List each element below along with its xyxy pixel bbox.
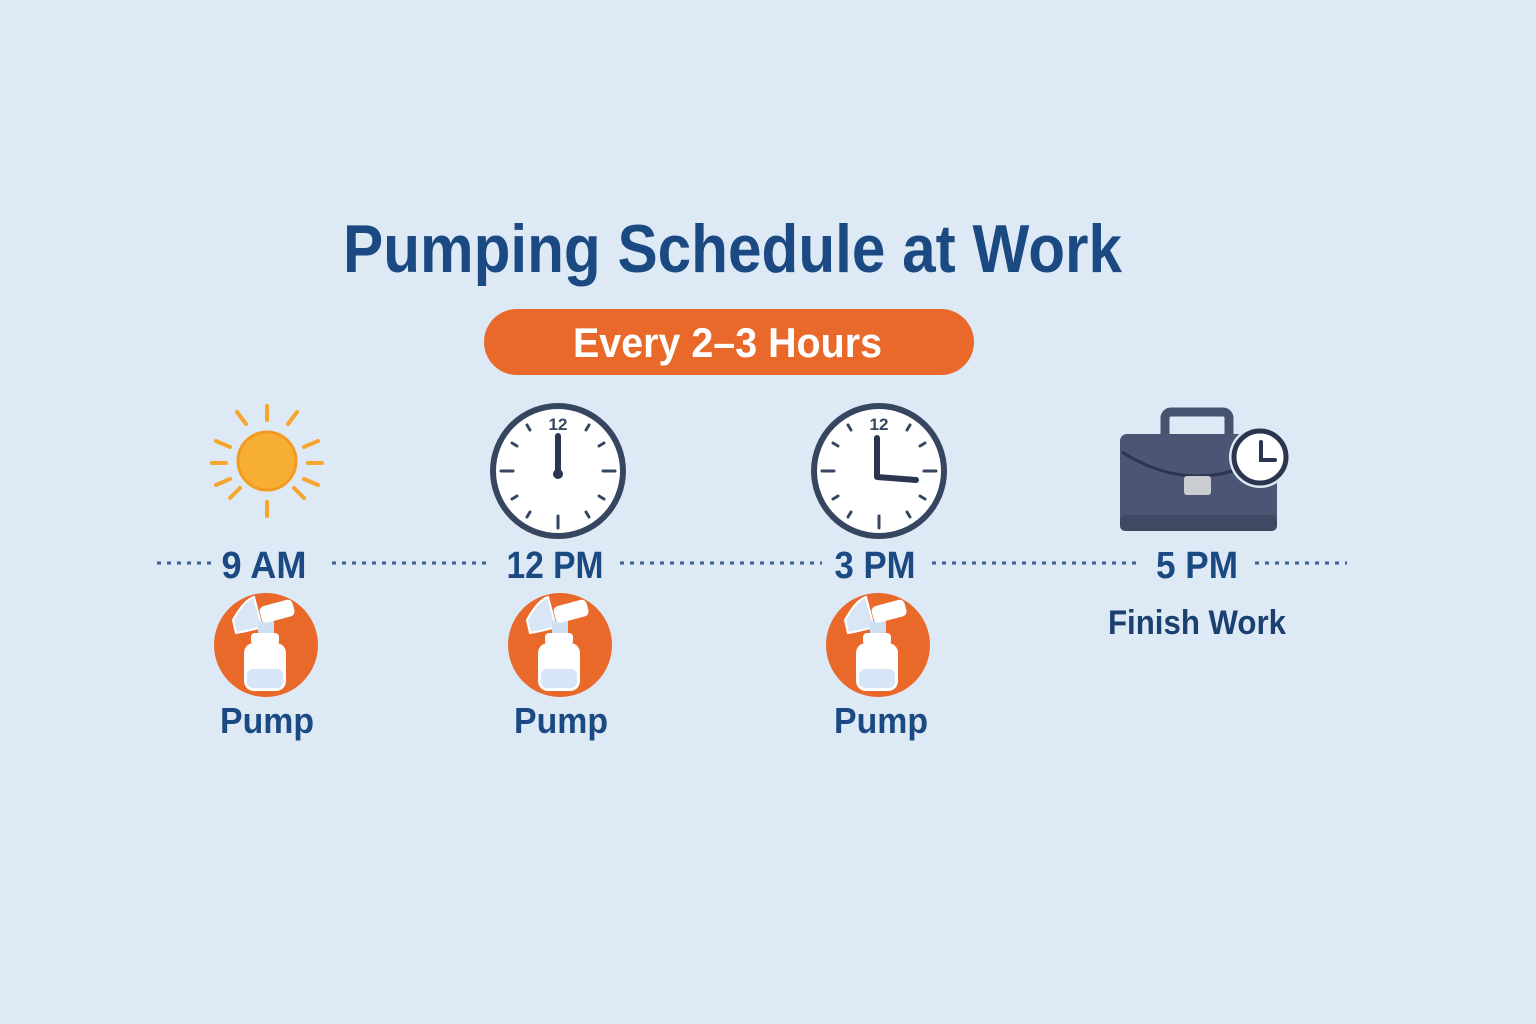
icon: sun bbox=[212, 406, 322, 516]
time labels: 9 AM bbox=[222, 545, 306, 587]
finish work label: Finish Work bbox=[1108, 604, 1286, 642]
pump labels: Pump bbox=[220, 700, 314, 741]
badge: every 2-3 hours: Every 2–3 Hours bbox=[573, 319, 882, 366]
time labels: 12 PM bbox=[506, 545, 604, 587]
timeline dotted line bbox=[157, 562, 1347, 564]
pump icons bbox=[214, 593, 930, 697]
icon: clock 3: 12 bbox=[870, 415, 888, 434]
time labels: 5 PM bbox=[1156, 545, 1238, 587]
pump labels bbox=[220, 700, 928, 741]
pump labels: Pump bbox=[834, 700, 928, 741]
time labels bbox=[222, 545, 1238, 587]
title: Pumping Schedule at Work bbox=[343, 211, 1122, 287]
time labels: 3 PM bbox=[834, 545, 916, 587]
icon: clock 3 bbox=[814, 406, 944, 536]
icon: clock 12 bbox=[493, 406, 623, 536]
badge: every 2-3 hours bbox=[484, 309, 974, 375]
pump labels: Pump bbox=[514, 700, 608, 741]
icon: briefcase with clock bbox=[1120, 412, 1291, 531]
icon: clock 12: 12 bbox=[549, 415, 567, 434]
